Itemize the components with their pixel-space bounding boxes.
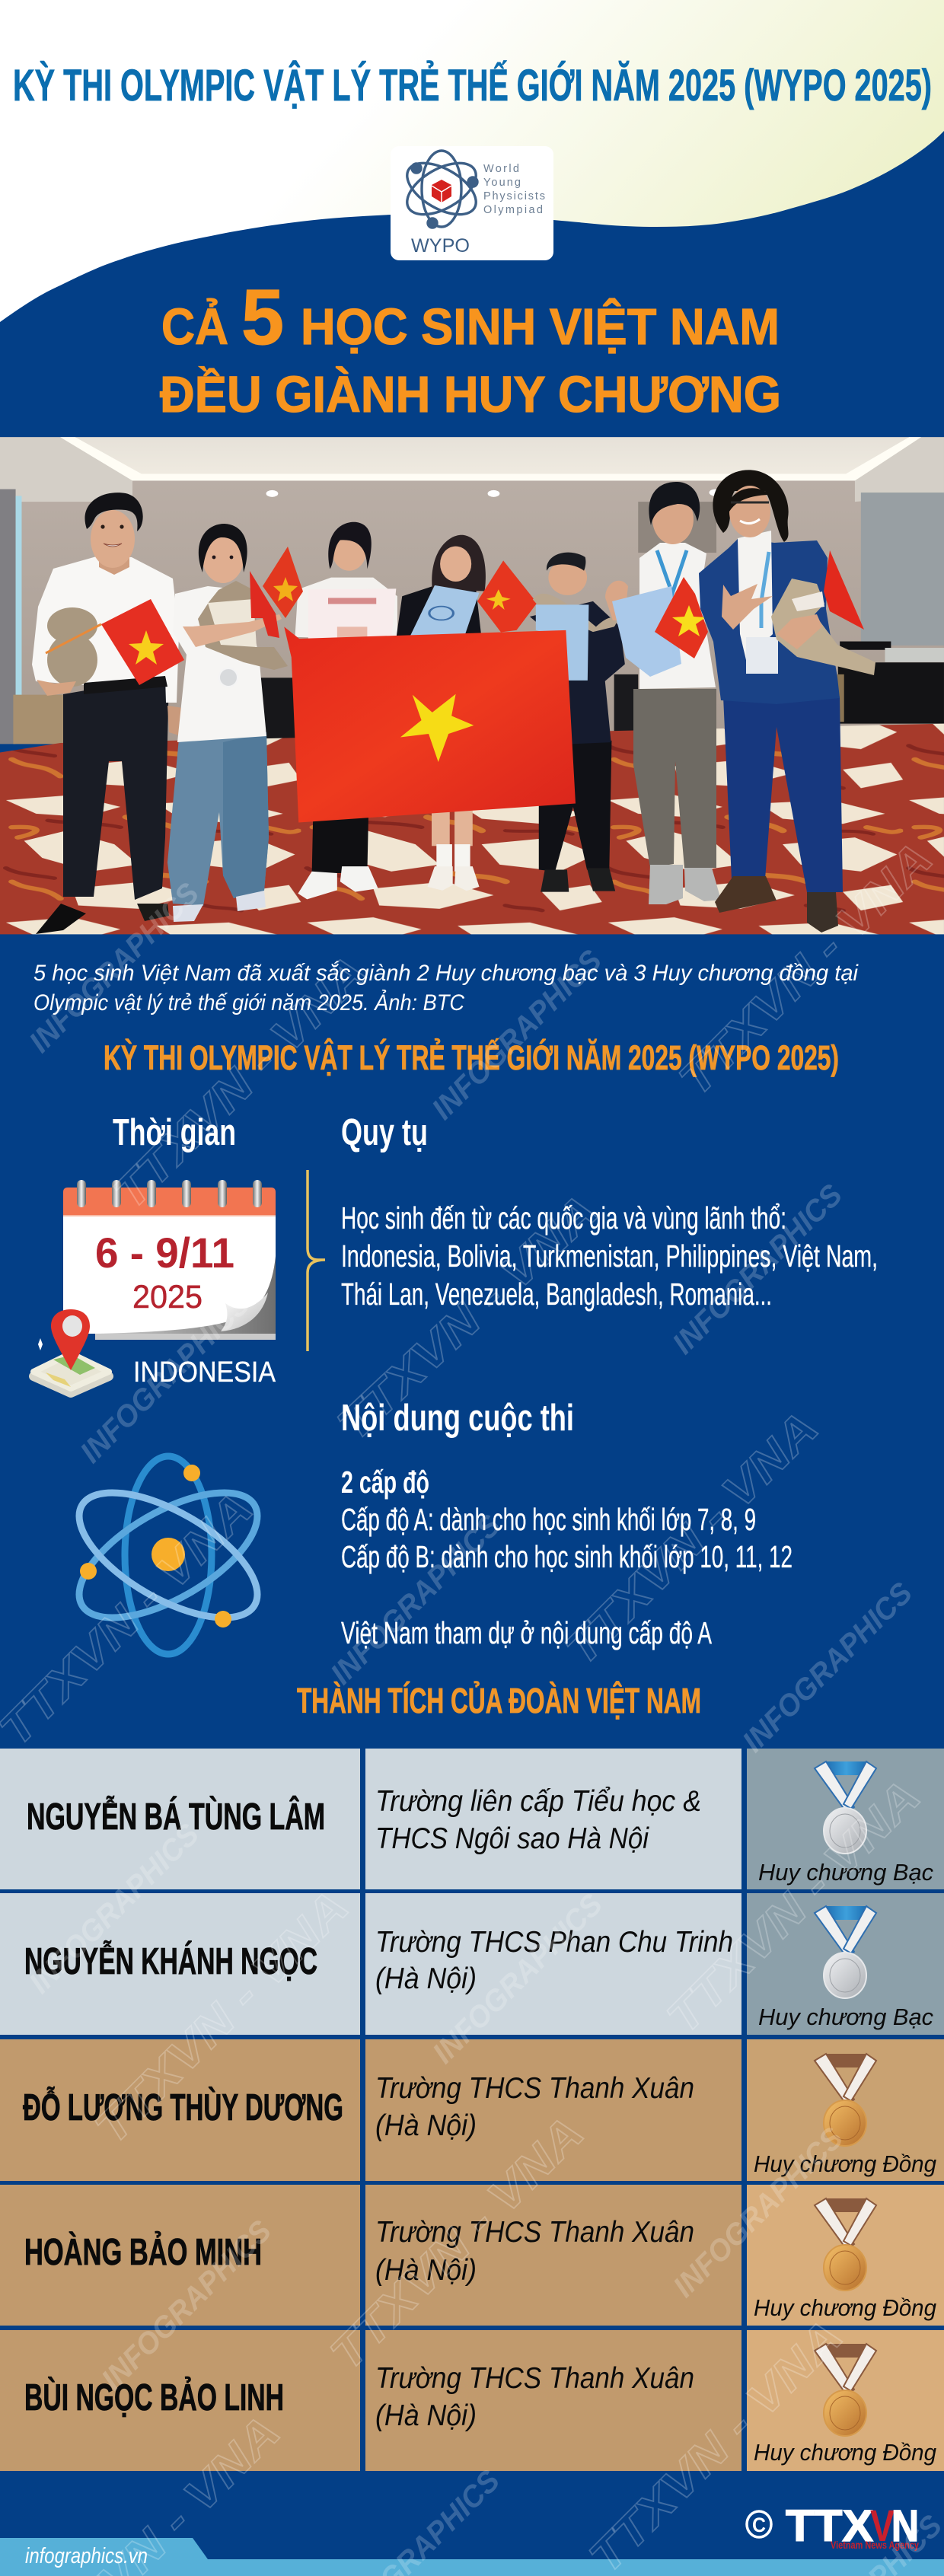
photo room background <box>0 437 944 744</box>
heading: participants: Quy tụ <box>341 1112 428 1153</box>
watermark: agency text: INFOGRAPHICS <box>74 1286 257 1469</box>
calendar date: 6 - 9/11 <box>95 1229 234 1277</box>
watermark: agency text: TTXVN - VNA <box>321 2107 593 2380</box>
watermark: agency text: INFOGRAPHICS <box>426 943 608 1126</box>
icon: map pin <box>33 1309 109 1393</box>
main heading: 5 <box>241 273 284 361</box>
row 4: Hoàng Bảo Minh: HOÀNG BẢO MINH <box>24 2231 262 2273</box>
person 2: girl with plush <box>167 524 303 922</box>
watermark: agency text: INFOGRAPHICS <box>736 1576 919 1758</box>
main heading: HỌC SINH VIỆT NAM <box>301 298 780 355</box>
location label: INDONESIA <box>133 1357 276 1388</box>
row 5: Bùi Ngọc Bảo Linh <box>0 2330 944 2471</box>
row 3: Đỗ Lương Thùy Dương: (Hà Nội) <box>375 2109 477 2142</box>
person 5: boy in navy jacket <box>530 553 625 892</box>
row 2: Nguyễn Khánh Ngọc: Trường THCS Phan Chu Trinh <box>375 1926 733 1959</box>
row 2: Nguyễn Khánh Ngọc: NGUYỄN KHÁNH NGỌC <box>24 1941 317 1982</box>
watermark: agency text <box>0 833 944 2576</box>
silver medal <box>815 1761 876 1854</box>
footer website: infographics.vn <box>25 2544 148 2568</box>
photo caption <box>33 961 859 1015</box>
calendar year: 2025 <box>132 1279 203 1315</box>
bronze medal <box>815 2054 876 2146</box>
row 5: Bùi Ngọc Bảo Linh: Huy chương Đồng <box>754 2439 936 2466</box>
brace connector <box>308 1170 325 1351</box>
watermark: agency text: INFOGRAPHICS <box>23 876 206 1059</box>
row 3: Đỗ Lương Thùy Dương: Huy chương Đồng <box>754 2150 936 2177</box>
watermark: agency text: TTXVN - VNA <box>579 2310 852 2576</box>
photo: Vietnamese delegation holding flag <box>0 437 944 934</box>
row 4: Hoàng Bảo Minh <box>0 2185 944 2326</box>
watermark: agency text: INFOGRAPHICS <box>426 1887 609 2070</box>
large Vietnamese flag <box>284 626 576 823</box>
photo carpet <box>0 724 944 934</box>
row 4: Hoàng Bảo Minh: Trường THCS Thanh Xuân <box>375 2216 694 2249</box>
row 1: Nguyễn Bá Tùng Lâm <box>0 1749 944 1889</box>
heading: time: Thời gian <box>113 1112 236 1153</box>
row 3: Đỗ Lương Thùy Dương <box>0 2039 944 2181</box>
person 3: girl with certificate <box>295 522 397 899</box>
logo: TTXVN: TTX <box>786 2501 873 2551</box>
row 1: Nguyễn Bá Tùng Lâm: THCS Ngôi sao Hà Nội <box>375 1822 649 1855</box>
footer strip <box>0 2538 944 2576</box>
row 1: Nguyễn Bá Tùng Lâm: NGUYỄN BÁ TÙNG LÂM <box>27 1796 325 1838</box>
logo: TTXVN: V <box>870 2501 895 2551</box>
row 1: Nguyễn Bá Tùng Lâm: Trường liên cấp Tiểu học & <box>375 1785 701 1818</box>
logo: TTXVN <box>747 2501 919 2551</box>
watermark: agency text: INFOGRAPHICS <box>667 2121 850 2303</box>
row 5: Bùi Ngọc Bảo Linh: (Hà Nội) <box>375 2399 477 2432</box>
competition levels text: Việt Nam tham dự ở nội dung cấp độ A <box>341 1615 712 1650</box>
logo: TTXVN: C <box>752 2514 766 2536</box>
main heading <box>160 273 781 423</box>
heading: competition content: Nội dung cuộc thi <box>341 1398 574 1439</box>
results table <box>0 1749 944 2471</box>
row 5: Bùi Ngọc Bảo Linh: BÙI NGỌC BẢO LINH <box>24 2377 284 2418</box>
main heading: CẢ <box>161 298 228 355</box>
row 4: Hoàng Bảo Minh: Huy chương Đồng <box>754 2294 936 2321</box>
logo wordmark: Olympiad <box>483 204 543 216</box>
person 4: girl with folder <box>396 535 537 891</box>
watermark: agency text: INFOGRAPHICS <box>95 2214 278 2396</box>
watermark: agency text: TTXVN - VNA <box>657 1771 930 2043</box>
bronze medal <box>815 2198 876 2291</box>
watermark: agency text: TTXVN - VNA <box>327 1184 608 1451</box>
row 2: Nguyễn Khánh Ngọc: (Hà Nội) <box>375 1962 477 1995</box>
row 2: Nguyễn Khánh Ngọc <box>0 1893 944 2035</box>
competition levels text: 2 cấp độ <box>341 1465 429 1500</box>
subheading: results: THÀNH TÍCH CỦA ĐOÀN VIỆT NAM <box>297 1681 701 1720</box>
photo caption: 5 học sinh Việt Nam đã xuất sắc giành 2 Huy chương bạc và 3 Huy chương đồng tại <box>33 961 859 986</box>
person 1: man in white shirt <box>32 493 184 934</box>
logo: TTXVN: Vietnam News Agency <box>831 2539 919 2551</box>
watermark: agency text: TTXVN - VNA <box>669 833 942 1105</box>
watermark: agency text: TTXVN - VNA <box>104 946 376 1219</box>
logo wordmark: Physicists <box>483 190 545 202</box>
bronze medal <box>815 2344 876 2436</box>
logo atom <box>399 151 484 228</box>
person 7: man in blue suit <box>699 470 875 933</box>
logo: TTXVN: N <box>891 2501 919 2551</box>
person 6: tall boy with folder <box>605 482 721 904</box>
logo wordmark: World <box>483 163 519 175</box>
row 3: Đỗ Lương Thùy Dương: ĐỖ LƯƠNG THÙY DƯƠNG <box>23 2087 343 2128</box>
row 5: Bùi Ngọc Bảo Linh: Trường THCS Thanh Xuân <box>375 2362 694 2395</box>
main heading: ĐỀU GIÀNH HUY CHƯƠNG <box>160 366 781 423</box>
row 4: Hoàng Bảo Minh: (Hà Nội) <box>375 2254 477 2287</box>
competition levels text <box>341 1465 793 1650</box>
watermark: agency text: INFOGRAPHICS <box>666 1178 849 1360</box>
logo wordmark: Young <box>483 177 521 189</box>
competition levels text: Cấp độ A: dành cho học sinh khối lớp 7, 8, 9 <box>341 1502 756 1537</box>
participants text <box>341 1200 878 1312</box>
watermark: agency text: TTXVN - VNA <box>555 1402 828 1675</box>
header cream wave <box>0 0 944 322</box>
watermark: agency text: TTXVN - VNA <box>85 1881 358 2154</box>
row 2: Nguyễn Khánh Ngọc: Huy chương Bạc <box>758 2004 933 2030</box>
logo wordmark <box>483 163 545 216</box>
icon: atom <box>60 1456 276 1654</box>
watermark: agency text: INFOGRAPHICS <box>23 1817 206 2000</box>
calendar rings <box>77 1180 262 1207</box>
logo WYPO text: WYPO <box>411 235 470 257</box>
icon: calendar <box>63 1180 276 1340</box>
photo caption: Olympic vật lý trẻ thế giới năm 2025. Ảnh: BTC <box>33 990 464 1015</box>
logo red cube <box>432 180 451 202</box>
silver medal <box>815 1906 876 1998</box>
logo: WYPO <box>391 146 553 260</box>
row 1: Nguyễn Bá Tùng Lâm: Huy chương Bạc <box>758 1859 933 1886</box>
watermark: agency text: INFOGRAPHICS <box>324 1508 507 1691</box>
row 3: Đỗ Lương Thùy Dương: Trường THCS Thanh Xuân <box>375 2072 694 2105</box>
